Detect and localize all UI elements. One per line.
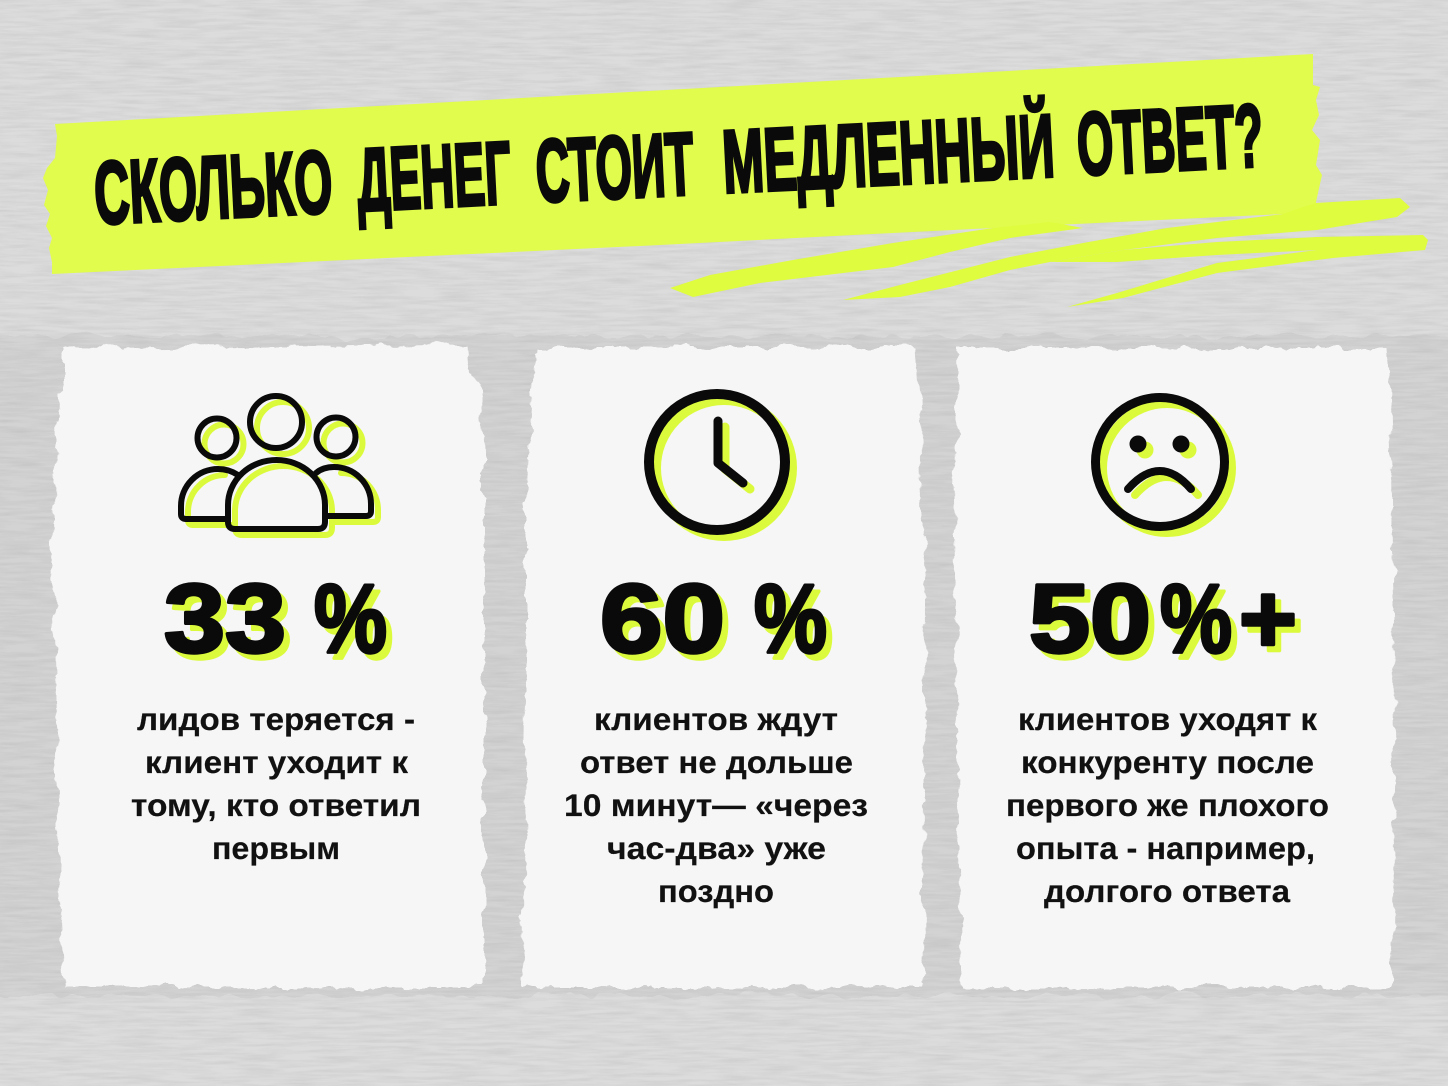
title: МЕДЛЕННЫЙ bbox=[720, 95, 1057, 212]
description: ответ не дольше bbox=[580, 744, 853, 780]
description: первым bbox=[212, 830, 340, 866]
description bbox=[564, 701, 868, 909]
description: клиентов уходят к bbox=[1018, 701, 1317, 737]
description: тому, кто ответил bbox=[131, 787, 421, 823]
stat: 50%+: % bbox=[1160, 564, 1232, 673]
stat: 60 %: % bbox=[760, 570, 833, 679]
stat: 60 %: % bbox=[754, 564, 827, 673]
banner brush strokes bbox=[670, 198, 1428, 307]
description: час-два» уже bbox=[607, 830, 826, 866]
description: лидов теряется - bbox=[137, 701, 415, 737]
stat: 33 % bbox=[164, 564, 393, 679]
stat: 33 %: % bbox=[320, 570, 393, 679]
stat: 60 %: 60 bbox=[606, 570, 731, 679]
panel: lost to competitors bbox=[954, 348, 1394, 987]
description: конкуренту после bbox=[1021, 744, 1314, 780]
description: долгого ответа bbox=[1044, 873, 1290, 909]
description: опыта - например, bbox=[1016, 830, 1315, 866]
title: ОТВЕТ? bbox=[1075, 85, 1265, 194]
stat: 50%+: 50 bbox=[1029, 564, 1151, 673]
icon: clock bbox=[649, 394, 792, 536]
stat: 33 %: 33 bbox=[164, 564, 286, 673]
description: поздно bbox=[658, 873, 774, 909]
stat: 50%+: % bbox=[1166, 570, 1238, 679]
stat: 60 %: 60 bbox=[600, 564, 725, 673]
description: клиентов ждут bbox=[594, 701, 838, 737]
stat: 33 %: 33 bbox=[170, 570, 292, 679]
icon: sad face bbox=[1096, 398, 1232, 532]
title: СТОИТ bbox=[533, 113, 696, 221]
stat: 50%+: + bbox=[1245, 570, 1303, 679]
panel: response expectations bbox=[522, 347, 925, 987]
stat: 33 %: % bbox=[314, 564, 387, 673]
stat: 50%+: + bbox=[1239, 564, 1297, 673]
title bbox=[92, 85, 1265, 243]
description: первого же плохого bbox=[1006, 787, 1329, 823]
panel: lost leads bbox=[52, 345, 484, 987]
stat: 50%+: 50 bbox=[1035, 570, 1157, 679]
torn underlayer behind cards bbox=[0, 336, 1448, 996]
description: 10 минут— «через bbox=[564, 787, 868, 823]
stat: 50%+ bbox=[1029, 564, 1303, 679]
icon: group of people bbox=[181, 396, 378, 535]
title: СКОЛЬКО bbox=[92, 131, 335, 243]
title banner bbox=[43, 54, 1428, 307]
stat: 60 % bbox=[600, 564, 833, 679]
card paper bbox=[954, 348, 1394, 987]
title: ДЕНЕГ bbox=[355, 122, 513, 230]
description bbox=[1006, 701, 1329, 909]
description: клиент уходит к bbox=[145, 744, 408, 780]
banner main strip bbox=[43, 54, 1322, 274]
description bbox=[131, 701, 421, 866]
card paper bbox=[52, 345, 484, 987]
card paper bbox=[522, 347, 925, 987]
